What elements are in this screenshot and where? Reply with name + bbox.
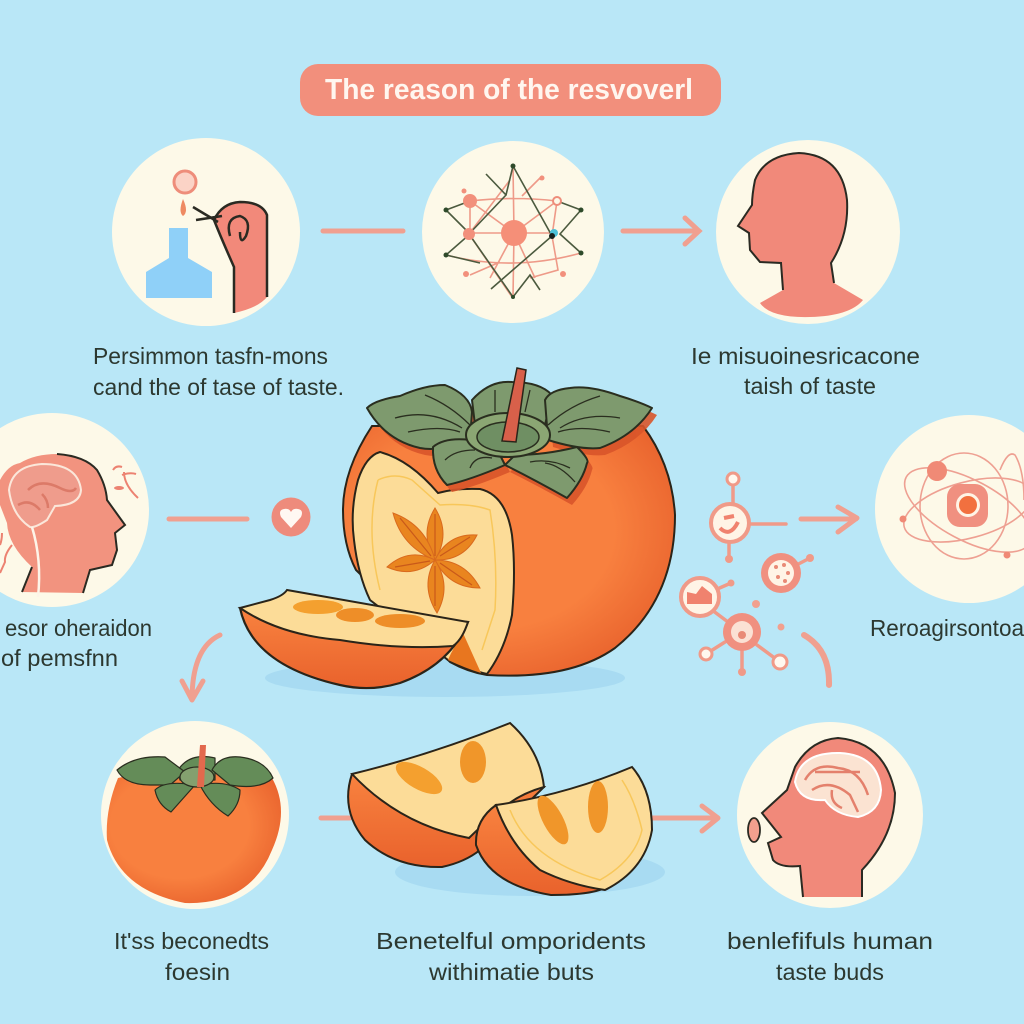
caption: top left: Persimmon tasfn-mons xyxy=(93,343,328,369)
panel: atom xyxy=(875,415,1024,603)
arrow: slices to head xyxy=(650,806,718,831)
caption: bottom left: It'ss beconedts xyxy=(114,928,269,954)
panel: head with brain tasting xyxy=(737,722,923,908)
icon: brain xyxy=(9,464,81,527)
icon cluster: molecules right xyxy=(681,473,814,676)
icon: hand xyxy=(214,202,267,313)
caption: bottom center xyxy=(376,928,646,985)
icon: leaves and stem xyxy=(367,368,657,505)
caption: bottom right: benlefifuls human xyxy=(727,928,933,954)
panel: brain head left xyxy=(0,413,149,607)
caption: top right xyxy=(691,343,920,399)
title xyxy=(300,64,721,116)
central persimmon illustration xyxy=(240,368,675,697)
panel: persimmon tasting hand and bottle xyxy=(112,138,300,326)
caption: bottom left: foesin xyxy=(165,959,230,985)
caption: middle left: esor oheraidon xyxy=(5,615,152,641)
panel: molecule network xyxy=(422,141,604,323)
caption: top right: Ie misuoinesricacone xyxy=(691,343,920,369)
caption: bottom right xyxy=(727,928,933,985)
icon: heart xyxy=(272,498,310,536)
icon: drop xyxy=(180,199,186,216)
caption: bottom left xyxy=(114,928,269,985)
caption: middle right: Reroagirsontoa xyxy=(870,615,1024,641)
title: The reason of the resvoverl xyxy=(325,74,693,106)
panel: human head profile xyxy=(716,140,900,324)
caption: top left xyxy=(93,343,344,400)
arrow: curved right xyxy=(804,635,829,685)
arrow: brain to heart xyxy=(169,516,247,522)
arrow: first to network xyxy=(323,228,403,234)
caption: middle left: of pemsfnn xyxy=(1,645,118,671)
arrow: network to head xyxy=(623,218,699,244)
icon: star core xyxy=(387,508,480,613)
arrow: molecules to atom xyxy=(801,507,857,532)
caption: bottom center: Benetelful omporidents xyxy=(376,928,646,954)
persimmon wedges xyxy=(348,723,665,896)
icon: brain xyxy=(795,753,881,817)
caption: top left: cand the of tase of taste. xyxy=(93,374,344,400)
panel: whole persimmon xyxy=(101,721,289,909)
caption: bottom right: taste buds xyxy=(776,959,884,985)
persimmon slice xyxy=(240,590,468,688)
caption: middle left xyxy=(1,615,152,671)
arrow: down to persimmon xyxy=(182,635,220,700)
caption: top right: taish of taste xyxy=(744,373,876,399)
arrow: persimmon to slices xyxy=(321,816,350,820)
caption: bottom center: withimatie buts xyxy=(428,959,594,985)
icon: bottle xyxy=(146,228,212,298)
icon: target symbol xyxy=(174,171,196,193)
